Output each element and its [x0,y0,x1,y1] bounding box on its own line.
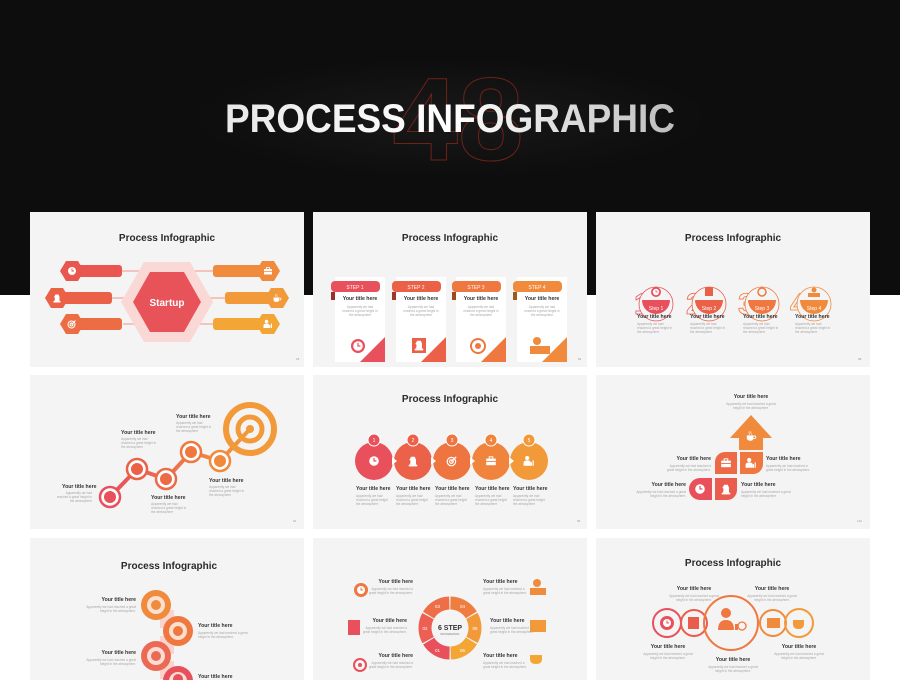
panel: vertical chain circles: Apparently we had reached a great [198,631,248,635]
step card 2: STEP 2 [407,285,425,291]
panel: arrow up blocks: great height in the atmosphere. [766,468,810,472]
panel: vertical chain circles [30,538,304,680]
step card 1: STEP 1 [346,285,364,291]
panel: circle chain horizontal: height in the atmosphere. [715,669,751,673]
panel: numbered circles: 4 [790,288,807,321]
panel: staircase to target: Your title here [176,414,211,420]
circle step 4 [797,287,831,321]
panel: five blobs: Apparently we had [435,494,462,498]
panel: arrow up blocks: height in the atmosphere. [741,494,777,498]
panel: staircase to target: Apparently we had [66,491,92,495]
panel: circle chain horizontal: Your title here [755,586,789,592]
panel: vertical chain circles: Process Infographic [121,561,218,572]
panel: numbered circles: reached a great height in [743,326,778,330]
step card 1: the atmosphere [349,313,371,317]
panel: 6 step ring: 06 [460,648,465,653]
step card 2 [392,277,446,362]
panel: staircase to target: reached a great height in [209,489,244,493]
step card 3: STEP 3 [467,285,485,291]
panel: 6 step ring: 05 [472,626,478,631]
panel: vertical chain circles: Your title here [198,674,233,680]
panel: staircase to target: reached a great height in [176,425,211,429]
panel: arrow up blocks: height in the atmosphere. [650,494,686,498]
panel: vertical chain circles: height in the atmosphere. [100,609,136,613]
panel: 6 step ring: 04 [460,604,465,609]
panel: circle chain horizontal: Apparently we had reached a great [774,652,824,656]
panel: numbered circles: 3 [738,288,755,321]
panel: step cards: 82 [578,357,582,361]
panel: five blobs: Your title here [435,486,470,492]
panel: circle chain horizontal: Your title here [782,644,816,650]
circle step 4: Step 4 [807,306,821,312]
panel: circle chain horizontal: height in the atmosphere. [781,656,817,660]
step card 3: the atmosphere [470,313,492,317]
panel: five blobs: Your title here [475,486,510,492]
panel: 6 step ring: Your title here [483,653,518,659]
panel: numbered circles: Apparently we had [743,322,770,326]
panel: arrow up blocks: Apparently we had reached a great [726,402,776,406]
panel: 6 step ring: Apparently we had reached a [372,661,413,665]
panel: arrow up blocks: great height in the atmosphere. [667,468,711,472]
panel: staircase to target: the atmosphere [151,510,173,514]
panel: 6 step ring: Your title here [378,579,413,585]
panel: five blobs: reached a great height [356,498,388,502]
panel: arrow up blocks [596,375,870,529]
step card 4: the atmosphere [531,313,553,317]
panel: startup hexagon: Startup [150,298,184,309]
panel: five blobs: reached a great height [396,498,428,502]
step card 4: STEP 4 [528,285,546,291]
panel: numbered circles: Apparently we had [690,322,717,326]
panel: staircase to target: Your title here [62,484,97,490]
panel: 6 step ring: Apparently we had reached a [483,661,525,665]
panel: five blobs: the atmosphere [396,502,418,506]
panel: startup hexagon [30,212,304,367]
panel: numbered circles: Your title here [795,314,830,320]
panel: 6 step ring: Your title here [490,618,525,624]
step card 2: the atmosphere [410,313,432,317]
panel: 6 step ring: great height in the atmosphere. [369,665,413,669]
step card 2: reached a great height in [403,309,439,313]
step card 2: Your title here [404,296,438,302]
panel: five blobs: the atmosphere [435,502,457,506]
panel: numbered circles: 98 [858,357,862,361]
panel: vertical chain circles: height in the atmosphere. [198,635,234,639]
panel: staircase to target: Apparently we had [151,502,178,506]
panel: five blobs: Your title here [356,486,391,492]
step card 1 [331,277,385,362]
panel: staircase to target: Your title here [121,430,156,436]
panel: five blobs: reached a great height [513,498,545,502]
panel: numbered circles: the atmosphere [637,330,659,334]
panel: circle chain horizontal: Your title here [651,644,685,650]
step card 3 [452,277,506,362]
panel: numbered circles [596,212,870,367]
panel: vertical chain circles: Your title here [102,650,136,656]
panel: arrow up blocks: Apparently we had reached a [670,464,711,468]
panel: five blobs: 5 [528,438,531,444]
panel: 6 step ring: great height in the atmosphere. [363,630,407,634]
panel: five blobs: Apparently we had [475,494,502,498]
panel: circle chain horizontal: Your title here [716,657,750,663]
panel: 6 step ring: Your title here [378,653,413,659]
panel: 6 step ring: Apparently we had reached a [490,626,532,630]
panel: five blobs: the atmosphere [356,502,378,506]
panel: arrow up blocks: height in the atmosphere. [733,406,769,410]
panel: 6 step ring [313,538,587,680]
step card 1: Your title here [343,296,377,302]
circle step 2: Step 2 [702,306,716,312]
panel: numbered circles: reached a great height in [795,326,830,330]
panel: five blobs [313,375,587,529]
panel: five blobs: Your title here [396,486,431,492]
panel: arrow up blocks: 110 [857,519,862,523]
panel: circle chain horizontal [596,538,870,680]
panel: numbered circles: Apparently we had [795,322,822,326]
header glow [190,58,710,178]
panel: arrow up blocks: Apparently we had reached a [766,464,808,468]
panel: step cards [313,212,587,367]
panel: five blobs: 4 [490,438,493,444]
panel: staircase to target: reached a great height in [121,441,156,445]
panel: five blobs: reached a great height [475,498,507,502]
panel: staircase to target: the atmosphere [70,499,92,503]
panel: 6 step ring: great height in the atmosphere. [369,591,413,595]
panel: arrow up blocks: Apparently we had reached a great [741,490,791,494]
panel: vertical chain circles: height in the atmosphere. [100,662,136,666]
panel: arrow up blocks: Your title here [676,456,711,462]
panel: 6 step ring: 01 [435,648,440,653]
panel: circle chain horizontal: Apparently we had reached a great [708,665,758,669]
panel: vertical chain circles: Your title here [102,597,136,603]
panel: vertical chain circles: Apparently we had reached a great [86,658,136,662]
panel: step cards: Process Infographic [402,233,499,244]
step card 4: Apparently we had [529,305,555,309]
panel: 6 step ring: 03 [435,604,440,609]
panel: staircase to target: Your title here [151,495,186,501]
panel: arrow up blocks: Your title here [734,394,768,400]
panel: numbered circles: Process Infographic [685,233,782,244]
panel: 6 step ring: Your title here [483,579,518,585]
panel: numbered circles: Your title here [690,314,725,320]
circle step 2 [692,287,726,321]
panel: five blobs: reached a great height [435,498,467,502]
panel: numbered circles: reached a great height in [637,326,672,330]
panel: 6 step ring: great height in the atmosphere. [483,665,527,669]
panel: five blobs: 1 [373,438,376,444]
panel: circle chain horizontal: Apparently we had reached a great [669,594,719,598]
panel: staircase to target: reached a great height in [57,495,92,499]
panel: circle chain horizontal: Process Infographic [685,558,782,569]
panel: five blobs: the atmosphere [475,502,497,506]
panel: 6 step ring: Apparently we had reached a [483,587,525,591]
panel: staircase to target: the atmosphere [121,445,143,449]
panel: five blobs: Apparently we had [513,494,540,498]
step card 2: Apparently we had [408,305,434,309]
panel: startup hexagon: Process Infographic [119,233,216,244]
panel: circle chain horizontal: Apparently we had reached a great [643,652,693,656]
panel: five blobs: 3 [451,438,454,444]
panel: numbered circles: 1 [634,288,651,321]
big outline number 48: 48 [392,54,524,186]
panel: numbered circles: the atmosphere [743,330,765,334]
panel: staircase to target: Apparently we had [176,421,203,425]
step card 3: Your title here [464,296,498,302]
panel: circle chain horizontal: height in the atmosphere. [676,598,712,602]
panel: numbered circles: the atmosphere [690,330,712,334]
step card 4: reached a great height in [524,309,560,313]
panel: vertical chain circles: Your title here [198,623,233,629]
panel: five blobs: 2 [412,438,415,444]
panel: 6 step ring: great height in the atmosphere. [490,630,534,634]
panel: five blobs: the atmosphere [513,502,535,506]
panel: five blobs: Apparently we had [356,494,383,498]
panel: startup hexagon: 18 [296,357,300,361]
panel: 6 step ring: great height in the atmosphere. [483,591,527,595]
circle step 1 [639,287,673,321]
panel: five blobs: Process Infographic [402,394,499,405]
panel: arrow up blocks: Your title here [652,482,686,488]
panel: arrow up blocks: Apparently we had reached a great [636,490,686,494]
step card 3: Apparently we had [468,305,494,309]
panel: staircase to target: Your title here [209,478,244,484]
step card 4: Your title here [525,296,559,302]
panel: numbered circles: reached a great height in [690,326,725,330]
panel: numbered circles: Apparently we had [637,322,664,326]
panel: staircase to target [30,375,304,529]
panel: staircase to target: Apparently we had [121,437,148,441]
panel: numbered circles: Your title here [743,314,778,320]
panel: vertical chain circles: Apparently we had reached a great [86,605,136,609]
panel: staircase to target: 61 [293,519,297,523]
header background [0,0,900,295]
step card 4 [513,277,567,362]
panel: arrow up blocks: Your title here [741,482,776,488]
panel: 6 step ring: Apparently we had reached a [372,587,413,591]
panel: five blobs: Apparently we had [396,494,423,498]
target icon [226,405,274,453]
step card 3: reached a great height in [463,309,499,313]
panel: arrow up blocks: Your title here [766,456,801,462]
panel: five blobs: 96 [577,519,581,523]
circle step 3 [745,287,779,321]
panel: staircase to target: reached a great height in [151,506,186,510]
panel: 6 step ring: 6 STEP [438,625,462,632]
panel: numbered circles: the atmosphere [795,330,817,334]
circle step 3: Step 3 [755,306,769,312]
panel: staircase to target: Apparently we had [209,485,236,489]
main title: PROCESS INFOGRAPHIC [225,97,675,141]
panel: 6 step ring: INFOGRAPHIC [440,632,460,636]
panel: numbered circles: 2 [686,288,703,321]
panel: numbered circles: Your title here [637,314,672,320]
circle step 1: Step 1 [649,306,663,312]
panel: five blobs: Your title here [513,486,548,492]
panel: staircase to target: the atmosphere [176,429,198,433]
panel: circle chain horizontal: height in the atmosphere. [650,656,686,660]
panel: staircase to target: the atmosphere [209,493,231,497]
panel: 6 step ring: 02 [422,626,428,631]
step card 1: reached a great height in [342,309,378,313]
panel: circle chain horizontal: height in the atmosphere. [754,598,790,602]
panel: circle chain horizontal: Apparently we had reached a great [747,594,797,598]
panel: circle chain horizontal: Your title here [677,586,711,592]
step card 1: Apparently we had [347,305,373,309]
panel: 6 step ring: Your title here [372,618,407,624]
panel: 6 step ring: Apparently we had reached a [366,626,407,630]
